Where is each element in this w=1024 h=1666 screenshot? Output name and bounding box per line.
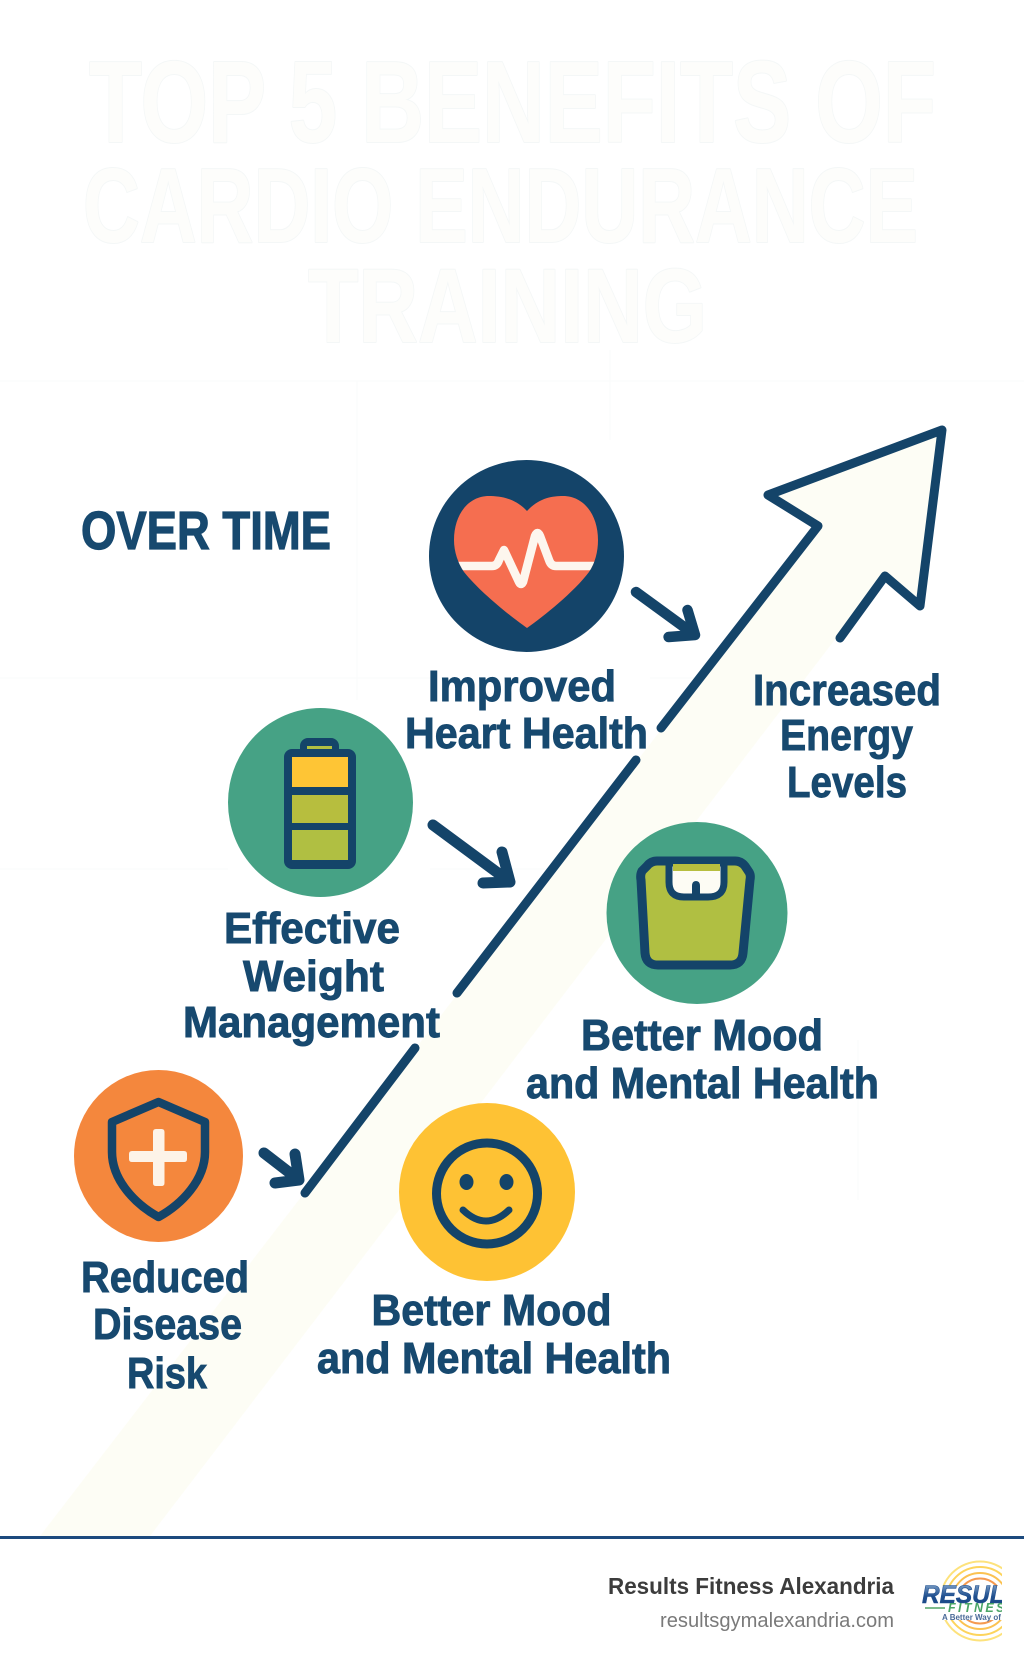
benefit: increased energy levels label: Energy [780, 711, 913, 760]
benefit: effective weight management [183, 708, 510, 1047]
label: Better Mood [581, 1011, 823, 1060]
benefit: reduced disease risk [74, 1070, 299, 1398]
benefit: better mood (scale) [526, 822, 879, 1108]
label [81, 1253, 249, 1398]
label [526, 1011, 879, 1108]
icon: weight scale [606, 822, 788, 1004]
footer text: Results Fitness Alexandria [608, 1573, 894, 1599]
arrow [264, 1153, 299, 1183]
title [83, 37, 936, 365]
label [183, 904, 440, 1047]
benefit: improved heart health [405, 460, 695, 758]
label: and Mental Health [317, 1334, 671, 1383]
label: and Mental Health [526, 1059, 879, 1108]
benefit: increased energy levels label: Increased [753, 666, 941, 715]
big rising arrow [40, 430, 942, 1536]
arrow [636, 592, 695, 637]
benefit: increased energy levels label [753, 666, 941, 807]
logo: results fitness: A Better Way of Life [942, 1613, 1018, 1622]
logo: results fitness: FITNESS [948, 1601, 1018, 1615]
benefit: increased energy levels label: Levels [787, 758, 907, 807]
icon: heart with pulse [429, 460, 624, 652]
heading: over time: OVER TIME [81, 501, 331, 561]
label [317, 1286, 671, 1383]
benefit: better mood (smiley) [317, 1103, 671, 1383]
footer text [608, 1573, 894, 1632]
label: Risk [127, 1349, 207, 1398]
label: Improved [428, 662, 616, 711]
footer rule [0, 1536, 1024, 1539]
title: TRAINING [308, 248, 707, 365]
footer text: resultsgymalexandria.com [660, 1610, 894, 1632]
logo: results fitness [922, 1560, 1002, 1642]
label: Management [183, 998, 440, 1047]
label [405, 662, 648, 758]
label: Weight [243, 952, 384, 1001]
label: Reduced [81, 1253, 249, 1302]
label: Heart Health [405, 709, 648, 758]
label: Better Mood [372, 1286, 612, 1335]
icon: smiley face [399, 1103, 575, 1281]
icon: battery [228, 708, 413, 897]
arrow [433, 825, 510, 883]
icon: shield with plus [74, 1070, 243, 1242]
label: Disease [93, 1300, 242, 1349]
label: Effective [224, 904, 400, 953]
